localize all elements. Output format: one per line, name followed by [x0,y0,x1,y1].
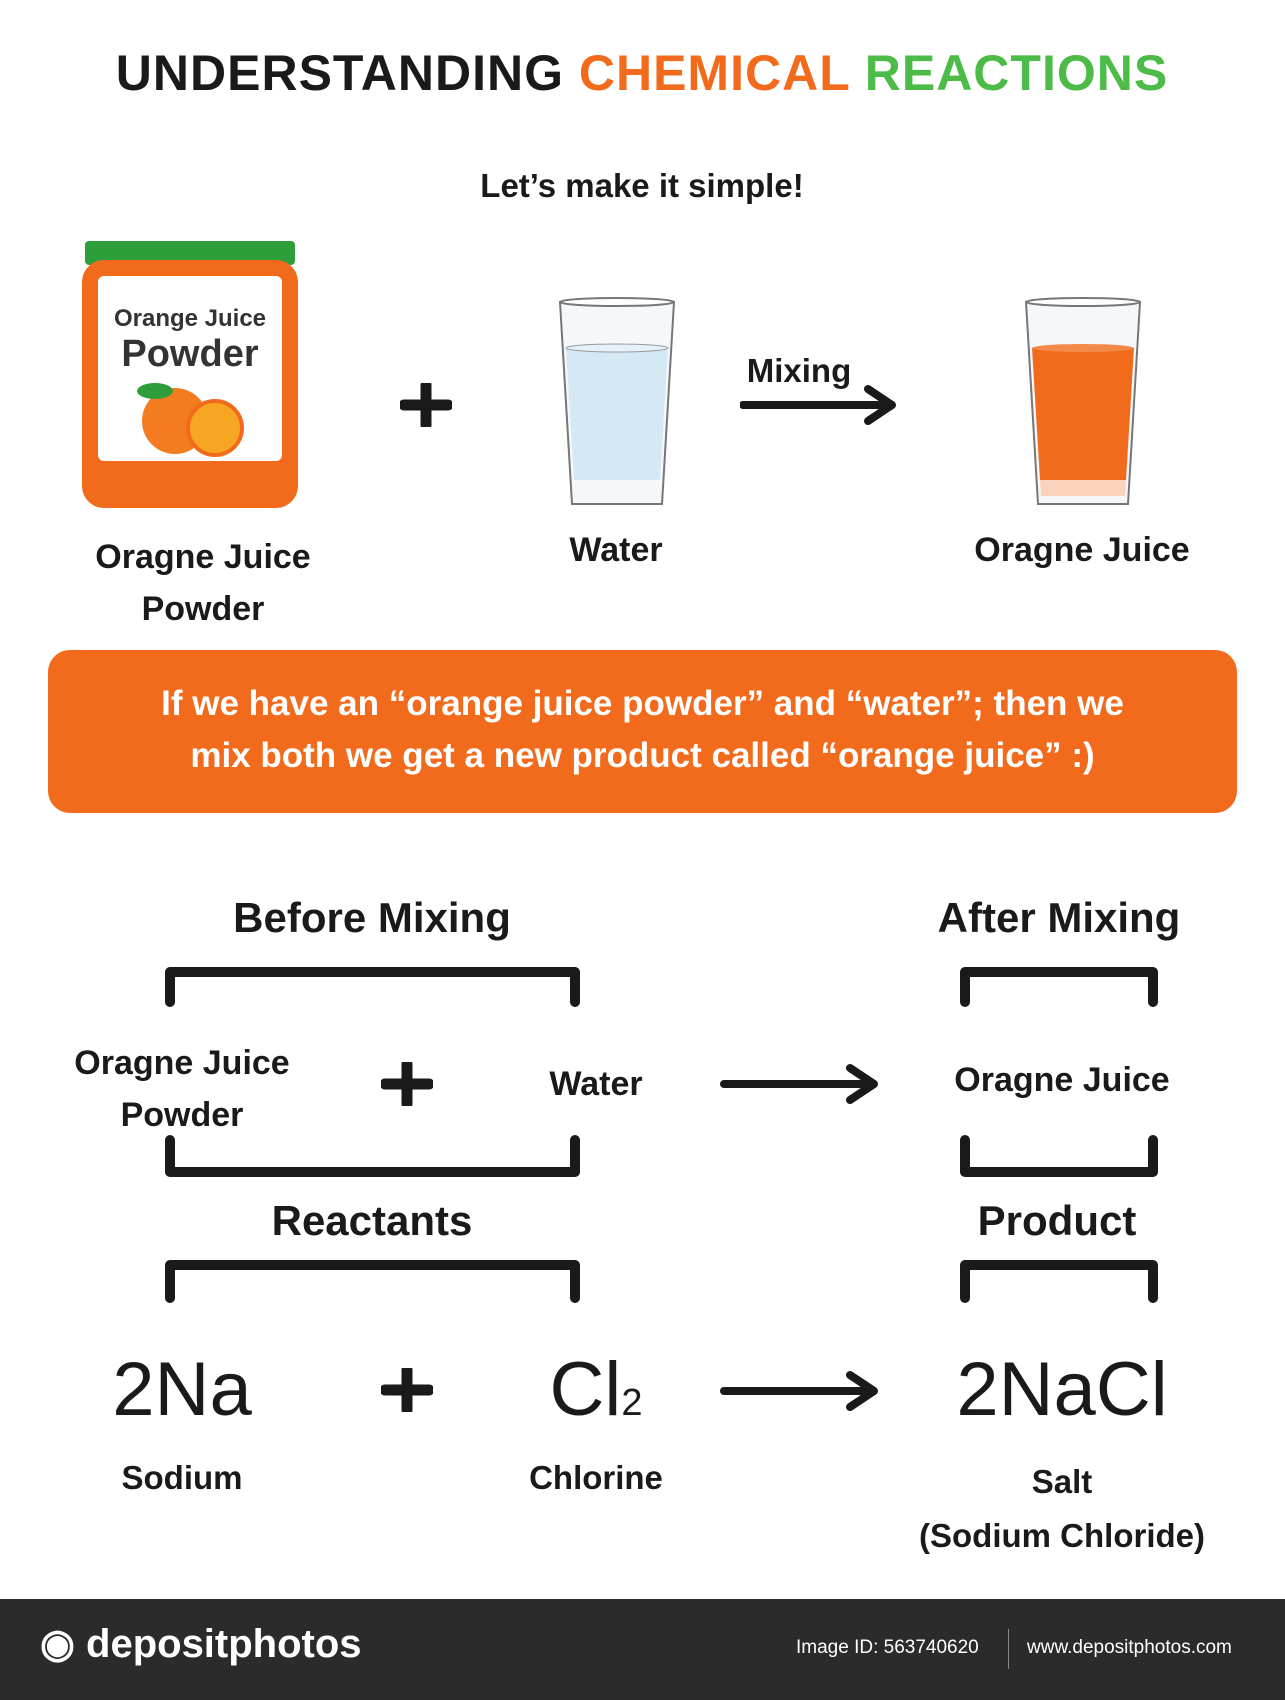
headings before/after: Before Mixing [233,894,511,941]
footer info: Image ID: 563740620 [796,1637,979,1658]
text: Water [569,531,663,569]
footer logo: ◉ depositphotos [40,1622,362,1666]
plus sign row 2 [381,1062,433,1106]
text: Oragne Juice [974,531,1190,569]
footer bar [0,1599,1285,1700]
text: (Sodium Chloride) [919,1517,1205,1554]
title: UNDERSTANDING CHEMICAL REACTIONS [116,45,1168,101]
icon: orange juice powder jar: Powder [121,333,259,375]
reactants / product: Reactants [272,1197,472,1244]
text: 2NaCl [956,1347,1168,1432]
plus sign [400,383,452,427]
text: Water [549,1065,643,1103]
text: Oragne Juice [954,1061,1170,1099]
row 2: words equation [74,1044,290,1134]
arrow: chemical [720,1371,878,1411]
labels row 1: Powder [142,590,264,628]
icon: orange juice powder jar: Orange Juice [114,305,266,332]
chemical equation: 2Na [112,1347,252,1432]
text: Cl2 [550,1347,642,1432]
row 2: words equation: Oragne Juice [74,1044,290,1082]
text: Chlorine [529,1459,663,1496]
icon: orange juice powder jar [82,241,298,508]
orange banner callout: If we have an “orange juice powder” and “water”; then we [161,684,1124,723]
plus sign row 3 [381,1368,433,1412]
icon: glass of orange juice [1024,297,1142,505]
orange banner callout: mix both we get a new product called “orange juice” :) [190,736,1095,775]
mixing label: Mixing [747,352,851,389]
labels row 1 [95,538,311,628]
chemical labels: Sodium [122,1459,242,1496]
footer bar: www.depositphotos.com [1027,1637,1232,1658]
text: Product [978,1197,1136,1244]
text: After Mixing [938,894,1180,941]
subtitle: Let’s make it simple! [480,167,804,204]
arrow: words [720,1064,878,1104]
arrow: mixing [740,385,896,425]
text: Salt [1032,1463,1092,1500]
labels row 1: Oragne Juice [95,538,311,576]
row 2: words equation: Powder [121,1096,243,1134]
icon: glass of water [558,297,676,505]
orange banner callout [48,650,1237,813]
